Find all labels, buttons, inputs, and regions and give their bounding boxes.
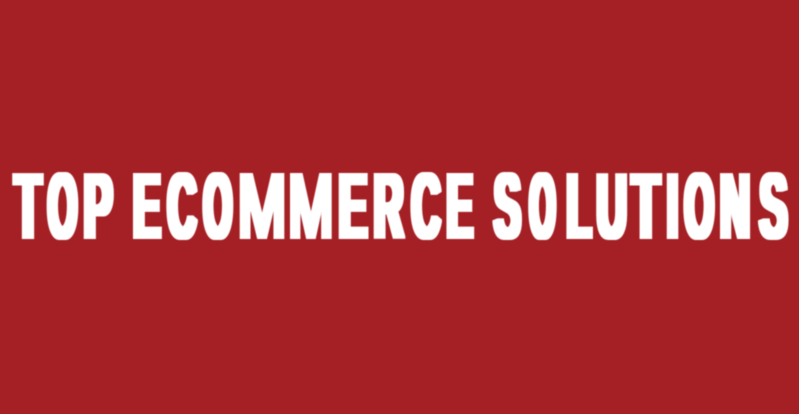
title: C [412,154,440,258]
title: O [204,154,232,258]
title: R [374,154,403,258]
title: L [567,154,591,258]
title: I [667,154,678,258]
title: M [238,154,286,258]
title: E [133,154,160,258]
title: M [289,154,333,258]
title: U [597,154,627,258]
title [15,154,787,258]
title: S [494,154,520,258]
title: T [632,154,660,258]
title: O [685,154,714,258]
title: C [168,154,196,258]
title: P [84,154,112,258]
title: O [48,154,77,258]
title: E [447,154,473,258]
title: O [530,154,555,258]
title: N [720,154,750,258]
title: T [15,154,41,258]
title: E [339,154,367,258]
